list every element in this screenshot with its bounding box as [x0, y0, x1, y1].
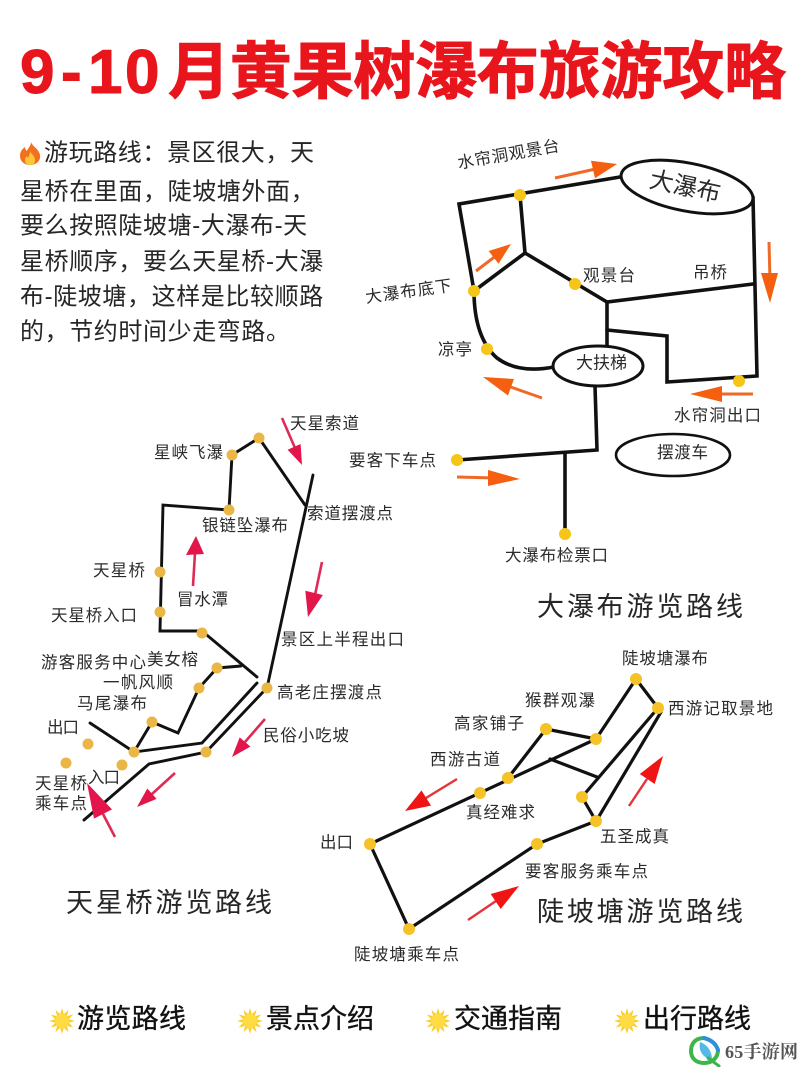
node: 摆渡车 [616, 434, 730, 476]
text block: route introduction: 要么按照陡坡塘-大瀑布-天 [20, 212, 308, 240]
text block: route introduction: 布-陡坡塘，这样是比较顺路 [20, 284, 324, 310]
footer tags [49, 1004, 751, 1034]
node: 大扶梯: 大扶梯 [576, 354, 627, 372]
place labels: 天星桥 [93, 561, 145, 580]
text block: route introduction: 星桥顺序，要么天星桥-大瀑 [20, 248, 324, 276]
place labels: 出口 [320, 833, 353, 852]
route lines [370, 679, 661, 929]
place labels [320, 649, 773, 964]
place labels: 水帘洞出口 [674, 406, 761, 425]
watermark: 65手游网 [725, 1042, 798, 1062]
place labels: 景区上半程出口 [281, 630, 404, 649]
text block: route introduction: 游玩路线：景区很大，天 [44, 140, 315, 166]
place labels: 陡坡塘乘车点 [354, 945, 459, 964]
place labels: 天星桥入口 [51, 606, 137, 625]
place labels: 陡坡塘瀑布 [622, 649, 708, 668]
place labels: 一帆风顺 [103, 673, 173, 692]
icon: flame [20, 142, 40, 165]
place labels: 天星桥 [35, 774, 87, 793]
place labels: 猴群观瀑 [525, 691, 596, 710]
node: 摆渡车: 摆渡车 [657, 443, 708, 462]
place labels: 西游古道 [430, 750, 500, 769]
heading: 大瀑布游览路线: 大瀑布游览路线 [537, 592, 743, 622]
place labels: 高老庄摆渡点 [277, 683, 382, 702]
place labels: 吊桥 [693, 263, 727, 282]
route lines [84, 438, 313, 820]
place labels: 要客服务乘车点 [525, 862, 648, 881]
direction arrows [87, 418, 323, 837]
place labels: 天星索道 [290, 414, 359, 433]
tag: 交通指南: 交通指南 [454, 1004, 562, 1034]
place labels: 星峡飞瀑 [154, 443, 224, 462]
place labels: 冒水潭 [177, 590, 228, 609]
place labels [35, 414, 404, 813]
node: 大瀑布 [617, 151, 757, 223]
place labels: 索道摆渡点 [307, 504, 393, 523]
text block: route introduction [20, 140, 324, 346]
tag: 景点介绍: 景点介绍 [266, 1004, 374, 1034]
place labels: 民俗小吃坡 [263, 726, 349, 745]
place labels: 真经难求 [466, 803, 535, 822]
text block: route introduction: 的，节约时间少走弯路。 [20, 318, 291, 346]
place labels: 西游记取景地 [668, 699, 773, 718]
watermark [691, 1038, 798, 1066]
direction arrows [405, 756, 663, 920]
place labels: 五圣成真 [600, 827, 669, 846]
place labels: 要客下车点 [349, 451, 436, 470]
place labels: 入口 [88, 769, 120, 787]
map points [364, 673, 664, 935]
place labels: 水帘洞观景台 [456, 136, 561, 173]
place labels [349, 136, 761, 565]
panel: 天星桥 route map [35, 414, 404, 837]
place labels: 乘车点 [35, 794, 87, 813]
place labels: 高家铺子 [454, 714, 524, 733]
node: 大瀑布: 大瀑布 [647, 166, 723, 208]
text block: route introduction: 星桥在里面，陡坡塘外面， [20, 178, 315, 206]
place labels: 大瀑布检票口 [505, 546, 608, 565]
panel: 陡坡塘 route map [320, 649, 773, 964]
panel: 大瀑布 route map [349, 136, 778, 565]
heading: 天星桥游览路线: 天星桥游览路线 [66, 888, 272, 918]
title: 9-10 [20, 38, 159, 106]
tag: 游览路线: 游览路线 [77, 1004, 186, 1034]
heading: 陡坡塘游览路线: 陡坡塘游览路线 [537, 897, 743, 927]
route lines [457, 177, 757, 534]
map points [60, 432, 272, 770]
tag: 出行路线: 出行路线 [643, 1004, 751, 1034]
icon: watermark logo [691, 1038, 719, 1066]
place labels: 大瀑布底下 [364, 276, 453, 307]
place labels: 马尾瀑布 [77, 694, 147, 713]
title: 月黄果树瀑布旅游攻略 [168, 38, 786, 106]
place labels: 出口 [47, 718, 79, 737]
place labels: 美女榕 [147, 650, 198, 669]
direction arrows [457, 161, 778, 486]
place labels: 观景台 [583, 266, 635, 285]
map points [451, 189, 745, 540]
place labels: 凉亭 [438, 340, 472, 359]
node: 大扶梯 [553, 346, 643, 386]
place labels: 银链坠瀑布 [202, 516, 288, 535]
place labels: 游客服务中心 [41, 653, 146, 672]
